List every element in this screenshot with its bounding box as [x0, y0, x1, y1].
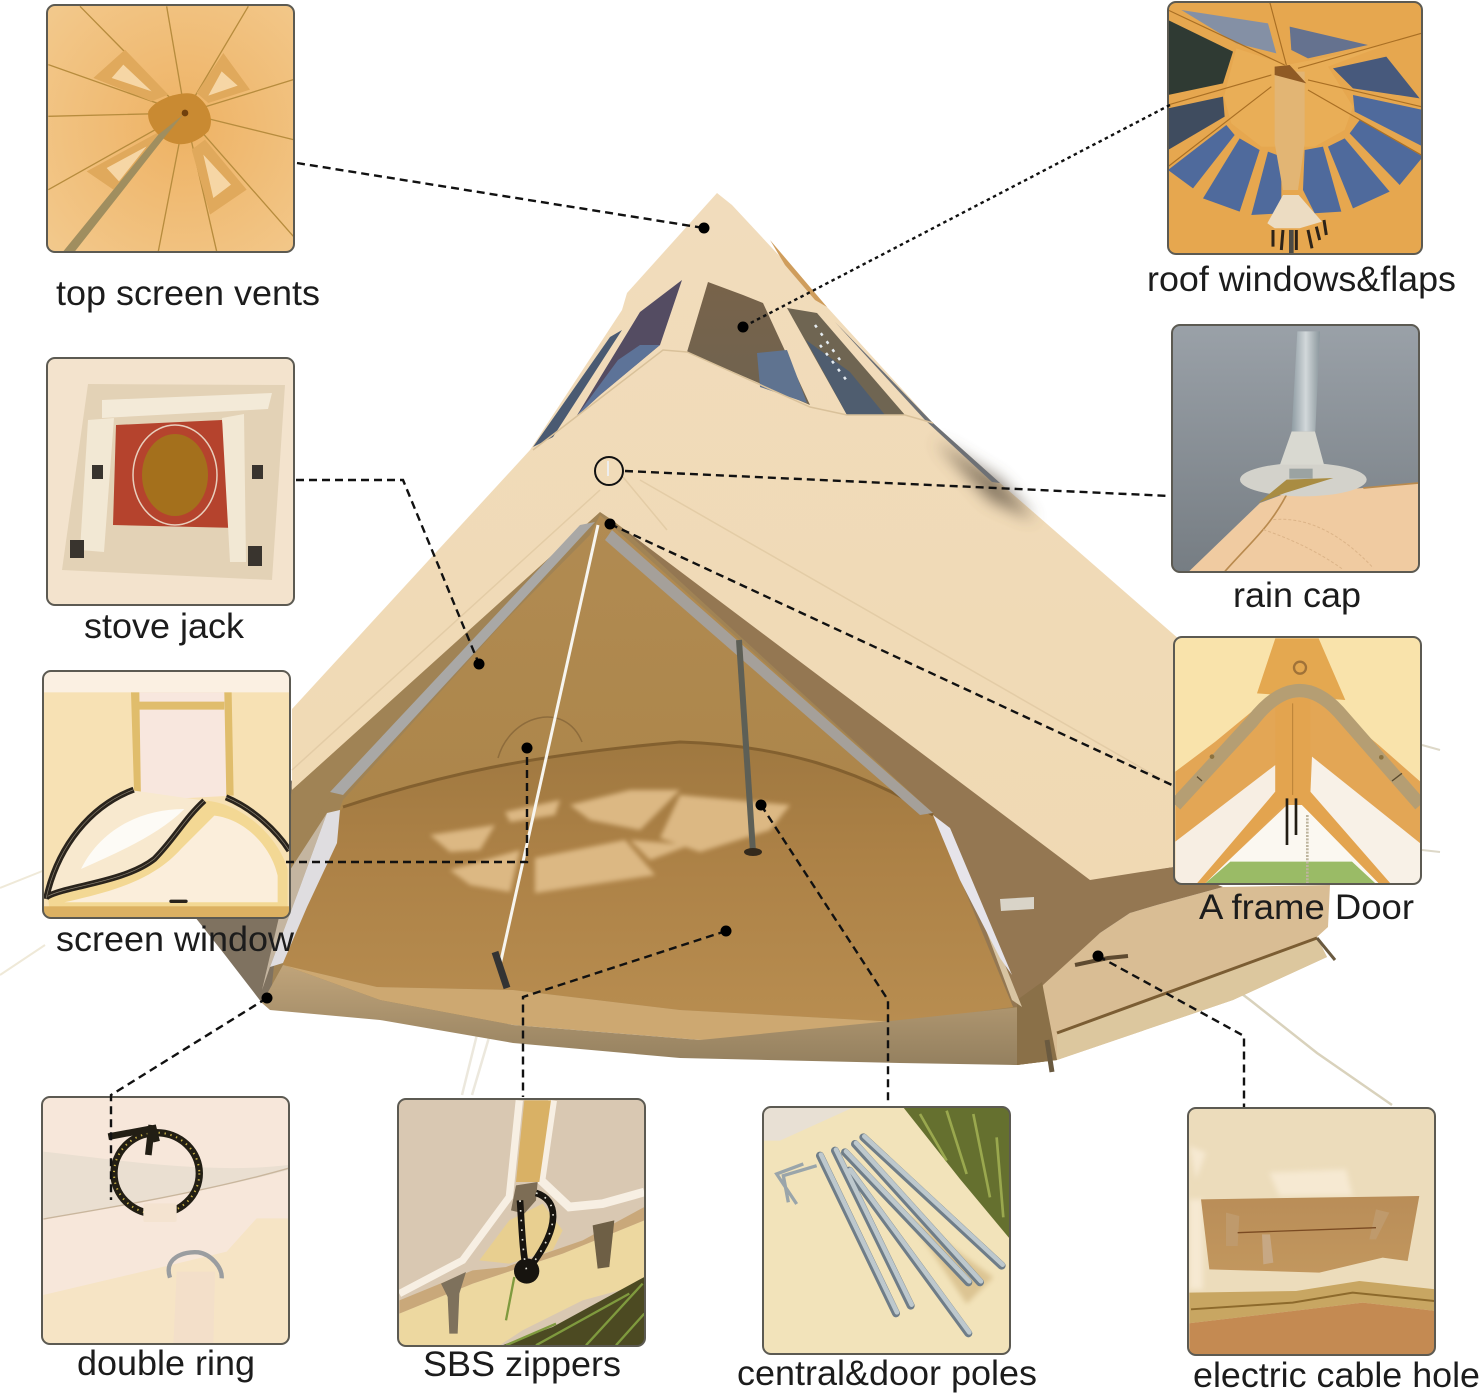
tassels [1273, 220, 1326, 250]
steel pole [1292, 331, 1320, 431]
flap seam [533, 350, 933, 450]
grass [496, 1277, 644, 1348]
seams [48, 6, 293, 251]
label: rain cap: rain cap [1233, 576, 1361, 615]
floor [283, 742, 1013, 1022]
soft fabric shadow [907, 1214, 993, 1304]
light patches [1189, 1146, 1353, 1289]
label: screen window: screen window [56, 920, 295, 959]
folded hem [43, 1152, 288, 1218]
callout: rain cap [595, 457, 1170, 496]
right roof window [787, 308, 905, 415]
rear orange edge [770, 240, 827, 307]
panel frame: screen window [43, 671, 290, 918]
canvas edge [399, 1100, 519, 1294]
label: roof windows and flaps: roof windows&flaps [1147, 260, 1456, 299]
open half circle [51, 790, 200, 892]
metal stops [511, 1182, 538, 1214]
main tent illustration [0, 193, 1440, 1105]
right corner dark wedge [1017, 982, 1057, 1065]
stitched arch [498, 717, 582, 758]
panel frame: A frame door [1174, 637, 1421, 884]
sod cloth right [1040, 885, 1330, 1060]
grass [1205, 862, 1375, 883]
storage tag [1000, 897, 1034, 911]
zipper [46, 790, 289, 899]
callout: A frame door [604, 518, 1172, 785]
vertical zipper [516, 1100, 551, 1182]
brass ring [1258, 478, 1333, 503]
centre disc [1224, 47, 1381, 147]
sod dark line [1057, 938, 1317, 1033]
panel: A frame door [1174, 637, 1421, 886]
panel: roof windows and flaps [1168, 2, 1423, 254]
vent hub [148, 93, 211, 144]
closed half flap [48, 801, 288, 907]
callout: electric cable hole [1092, 950, 1244, 1107]
curved frame [1175, 691, 1420, 805]
panel: stove jack [47, 358, 294, 605]
seams [1168, 2, 1421, 167]
corner pegs [1047, 1040, 1052, 1072]
rope loop [114, 1133, 199, 1214]
panel: SBS zippers [398, 1099, 645, 1348]
webbing strap [173, 1272, 215, 1346]
pocket [1201, 1196, 1419, 1273]
label: A frame door: A frame Door [1199, 888, 1414, 927]
front guy rope [500, 525, 598, 965]
panel frame: roof windows [1168, 2, 1422, 254]
panel frame: rain cap [1172, 325, 1419, 572]
door side bands [330, 522, 595, 795]
door opening back wall [283, 515, 1013, 1007]
cable hole slit [1075, 956, 1128, 965]
roof body [292, 193, 1180, 880]
door gap sky [1202, 805, 1385, 886]
left door strip [292, 515, 600, 857]
panel: electric cable hole [1188, 1108, 1436, 1357]
lighter floor lip [283, 965, 1022, 1040]
right door curtain [950, 828, 1022, 1007]
callout: stove jack [296, 480, 484, 670]
rope [520, 1193, 553, 1270]
top gusset [1257, 638, 1345, 700]
D ring [169, 1252, 222, 1278]
callout: poles [756, 800, 888, 1105]
panel: central and door poles [763, 1107, 1010, 1354]
window panes [1181, 10, 1276, 53]
sunlight on floor [430, 790, 790, 893]
collar disc [1240, 463, 1367, 496]
callout: top screen vents [297, 163, 710, 234]
gathered drape [1275, 72, 1305, 190]
left roof windows [533, 280, 682, 447]
vent flaps [87, 50, 250, 215]
zipper band [1189, 1281, 1436, 1323]
middle roof window [687, 282, 810, 405]
lower fabric [43, 1218, 288, 1346]
callout: double ring [111, 992, 272, 1200]
tent left shadow side [195, 780, 292, 1003]
label: double ring: double ring [77, 1344, 255, 1383]
panel frame: SBS zippers [398, 1099, 645, 1346]
panel frame: electric cable hole [1188, 1108, 1435, 1355]
label: electric cable hole: electric cable hole [1193, 1356, 1480, 1394]
right mesh [1310, 757, 1420, 883]
callout: roof windows [738, 105, 1170, 332]
panel frame: poles [763, 1107, 1010, 1354]
hooks [777, 1164, 817, 1204]
front sod strip [262, 965, 1057, 1065]
door strap [1197, 698, 1390, 883]
guy ropes [0, 745, 1440, 1105]
sod lower strip right [1057, 938, 1327, 1060]
callout: screen window [286, 742, 532, 862]
canvas [1187, 482, 1420, 574]
roof shadow [935, 440, 1035, 520]
label: stove jack: stove jack [84, 607, 245, 646]
brown side wall [600, 508, 1223, 1007]
pole [63, 115, 183, 251]
panel frame: stove jack [47, 358, 294, 605]
callout: SBS zippers [523, 926, 732, 1097]
panel frame: vents [47, 5, 294, 252]
left door curtain [262, 813, 327, 990]
panel: screen window [41, 669, 293, 920]
panel frame: double ring [42, 1097, 289, 1344]
poles [820, 1136, 1003, 1333]
panel: rain cap [1172, 325, 1420, 574]
roof seam lines [292, 477, 1180, 790]
tent backdrop [270, 505, 1090, 1065]
ground sheet top [763, 1107, 853, 1141]
pull rope [1287, 798, 1296, 845]
horizontal zipper [399, 1207, 644, 1314]
floor seam [343, 742, 933, 815]
panel: top screen vents [47, 5, 294, 252]
rope tab [143, 1203, 177, 1222]
left mesh [1175, 765, 1275, 883]
grass [903, 1107, 1010, 1239]
lower fabric [1189, 1303, 1436, 1357]
rope tensioner [495, 952, 507, 988]
hanging flap [139, 692, 233, 801]
label: SBS zippers: SBS zippers [423, 1345, 621, 1384]
label: central and door poles: central&door poles [737, 1354, 1037, 1393]
centre pole [739, 640, 753, 852]
label: top screen vents: top screen vents [56, 274, 320, 313]
panel: double ring [42, 1097, 289, 1346]
orange door valance [1175, 695, 1420, 883]
vent bell [1267, 195, 1322, 228]
collar cone [1280, 431, 1324, 465]
base fabric [399, 1220, 644, 1348]
